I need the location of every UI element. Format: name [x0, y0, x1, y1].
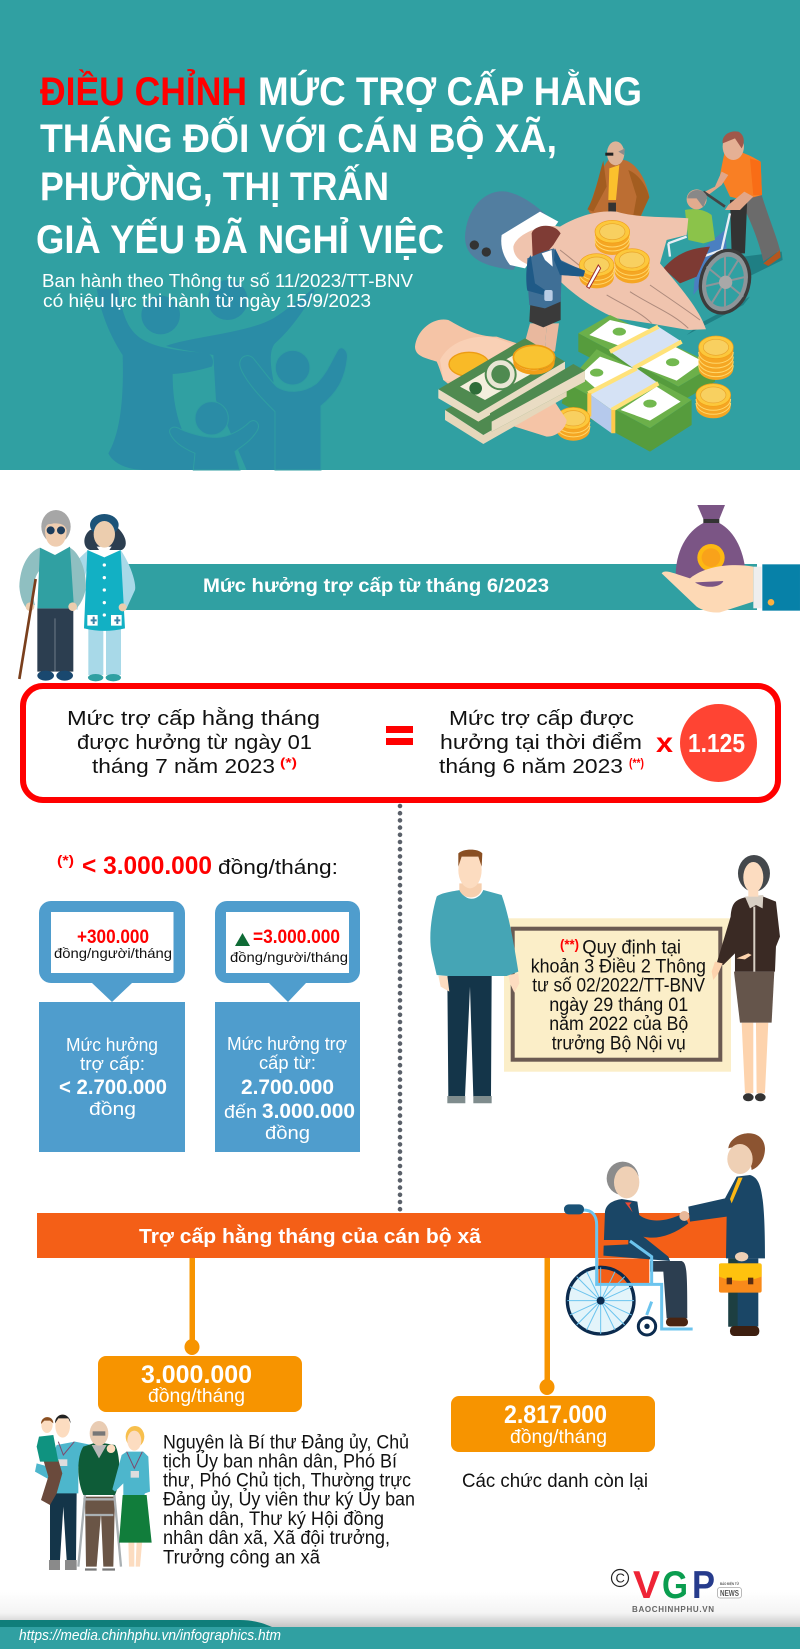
heading: under 3,000,000: đồng/tháng:: [218, 857, 338, 879]
side coin stacks: [557, 336, 733, 441]
panel: below 2,700,000: [39, 901, 185, 1152]
value box: 3,000,000: [98, 1356, 302, 1412]
condition box: Mức hưởng trợ: [227, 1034, 347, 1054]
formula left text: tháng 7 năm 2023: [92, 756, 275, 778]
note board: [504, 918, 731, 1072]
value box: 2,817,000: đồng/tháng: [510, 1427, 607, 1448]
callout: up to 3,000,000: =3.000.000: [253, 927, 340, 948]
title: MỨC TRỢ CẤP HẰNG: [258, 68, 642, 114]
title: GIÀ YẾU ĐÃ NGHỈ VIỆC: [36, 216, 444, 262]
money bundle back: [578, 315, 715, 403]
equals sign: [386, 726, 413, 745]
subtitle: có hiệu lực thi hành từ ngày 15/9/2023: [43, 291, 371, 311]
banner: entitlement from June 2023: [100, 564, 757, 610]
header background: [0, 0, 800, 470]
formula right text: Mức trợ cấp được: [449, 708, 634, 730]
callout: +300,000: +300.000: [77, 927, 149, 948]
logo: VGP News: [612, 1564, 742, 1614]
formula left text: Mức trợ cấp hằng tháng: [67, 707, 320, 730]
woman in brown suit: [712, 855, 780, 1101]
formula right text: tháng 6 năm 2023: [439, 756, 623, 778]
subtitle: [42, 271, 413, 311]
text: remaining positions: Các chức danh còn lại: [462, 1471, 648, 1492]
connector line to 2,817,000: [540, 1258, 554, 1395]
icon: handshake with wheelchair user: [564, 1133, 765, 1336]
multiply sign: x: [656, 727, 673, 758]
formula left text: [67, 707, 320, 778]
coefficient circle: 1.125: [688, 728, 745, 758]
footer bar: [0, 1620, 800, 1649]
banner: entitlement from June 2023: Mức hưởng trợ cấp từ tháng 6/2023: [203, 576, 549, 597]
condition box: cấp từ:: [259, 1053, 316, 1073]
value box: 3,000,000: đồng/tháng: [148, 1386, 245, 1407]
icon: hand receiving money bag: [662, 505, 800, 613]
heading: under 3,000,000: [57, 852, 338, 880]
icon: family group: [35, 1414, 152, 1571]
title: THÁNG ĐỐI VỚI CÁN BỘ XÃ,: [40, 115, 557, 161]
illustration: hands, money and people: [415, 131, 783, 452]
callout: +300,000: [39, 901, 185, 1002]
callout: +300,000: đồng/người/tháng: [54, 945, 172, 961]
shadows under wheelchair: [687, 252, 783, 335]
condition box: đồng: [89, 1099, 136, 1119]
callout: up to 3,000,000: đồng/người/tháng: [230, 949, 348, 965]
title: ĐIỀU CHỈNH: [40, 68, 247, 114]
note board: (**): [560, 936, 579, 952]
text: positions receiving 3,000,000: nhân dân, Thư ký Hội đồng: [163, 1509, 384, 1530]
title: [36, 68, 642, 262]
logo: VGP News: C: [616, 1570, 625, 1586]
text: positions receiving 3,000,000: [163, 1432, 415, 1568]
value box: 2,817,000: [451, 1396, 655, 1452]
condition box: trợ cấp:: [80, 1054, 145, 1074]
condition box: đồng: [265, 1123, 310, 1143]
value box: 3,000,000: 3.000.000: [141, 1361, 252, 1389]
text: positions receiving 3,000,000: tịch Ủy ban nhân dân, Phó Bí: [163, 1450, 398, 1472]
note board: năm 2022 của Bộ: [549, 1014, 688, 1035]
text: positions receiving 3,000,000: Nguyên là Bí thư Đảng ủy, Chủ: [163, 1432, 409, 1453]
condition box: 3.000.000: [262, 1100, 355, 1123]
text: positions receiving 3,000,000: thư, Phó Chủ tịch, Thường trực: [163, 1471, 411, 1492]
condition box: đến: [224, 1102, 257, 1122]
text: positions receiving 3,000,000: Đảng ủy, Ủy viên thư ký Ủy ban: [163, 1489, 415, 1511]
note board: khoản 3 Điều 2 Thông: [531, 957, 706, 978]
logo: VGP News: V: [633, 1564, 660, 1607]
lower hand holding cash: [415, 319, 585, 444]
text: positions receiving 3,000,000: nhân dân xã, Xã đội trưởng,: [163, 1528, 390, 1549]
subtitle: Ban hành theo Thông tư số 11/2023/TT-BNV: [42, 271, 413, 291]
note board: ngày 29 tháng 01: [549, 995, 688, 1016]
formula box: [23, 686, 778, 800]
callout: up to 3,000,000: [215, 901, 360, 1002]
condition box: < 2.700.000: [59, 1076, 167, 1099]
panel: 2,700,000 to 3,000,000: [215, 901, 360, 1152]
logo: VGP News: P: [692, 1564, 715, 1607]
woman with tablet: [525, 226, 601, 352]
condition box: 2.700.000: [241, 1076, 334, 1099]
man in teal sweater: [430, 850, 519, 1103]
icon: elderly man and nurse: [19, 510, 135, 681]
heading: under 3,000,000: (*): [57, 852, 74, 868]
logo: VGP News: G: [662, 1564, 688, 1607]
condition box: [39, 1002, 185, 1152]
condition box: Mức hưởng: [66, 1035, 158, 1055]
formula left text: được hưởng từ ngày 01: [77, 732, 312, 754]
banner: monthly allowance of commune officials: Trợ cấp hằng tháng của cán bộ xã: [139, 1224, 482, 1248]
footer bar: https://media.chinhphu.vn/infographics.htm: [19, 1627, 281, 1644]
title: PHƯỜNG, THỊ TRẤN: [40, 163, 389, 209]
logo: VGP News: BAOCHINHPHU.VN: [632, 1605, 714, 1614]
background silhouette: family: [97, 280, 347, 470]
dotted connector: [398, 806, 402, 1212]
formula right text: (**): [629, 756, 644, 770]
footer shadow: [0, 1592, 800, 1627]
note board: tư số 02/2022/TT-BNV: [532, 976, 705, 997]
condition box: [215, 1002, 360, 1152]
note board: trưởng Bộ Nội vụ: [552, 1033, 686, 1054]
text: positions receiving 3,000,000: Trưởng công an xã: [163, 1547, 320, 1568]
banner: monthly allowance of commune officials: [37, 1213, 727, 1258]
wheelchair with seated person and pusher: [663, 131, 781, 318]
value box: 2,817,000: 2.817.000: [504, 1401, 607, 1429]
note board: Quy định tại: [582, 937, 681, 958]
money bundle front: [562, 349, 692, 452]
coins on hand: [579, 220, 649, 288]
man with jacket: [587, 141, 649, 218]
heading: under 3,000,000: < 3.000.000: [82, 852, 212, 880]
formula right text: hưởng tại thời điểm: [440, 732, 642, 754]
connector line to 3,000,000: [184, 1258, 200, 1355]
logo: VGP News: BÁO ĐIỆN TỬ: [720, 1581, 739, 1586]
large upper hand with sleeve: [465, 191, 706, 330]
formula right text: [439, 708, 644, 778]
logo: VGP News: NEWS: [720, 1589, 740, 1598]
formula left text: (*): [280, 755, 297, 770]
coefficient circle: [680, 704, 757, 782]
sign note with two people: [430, 850, 780, 1103]
